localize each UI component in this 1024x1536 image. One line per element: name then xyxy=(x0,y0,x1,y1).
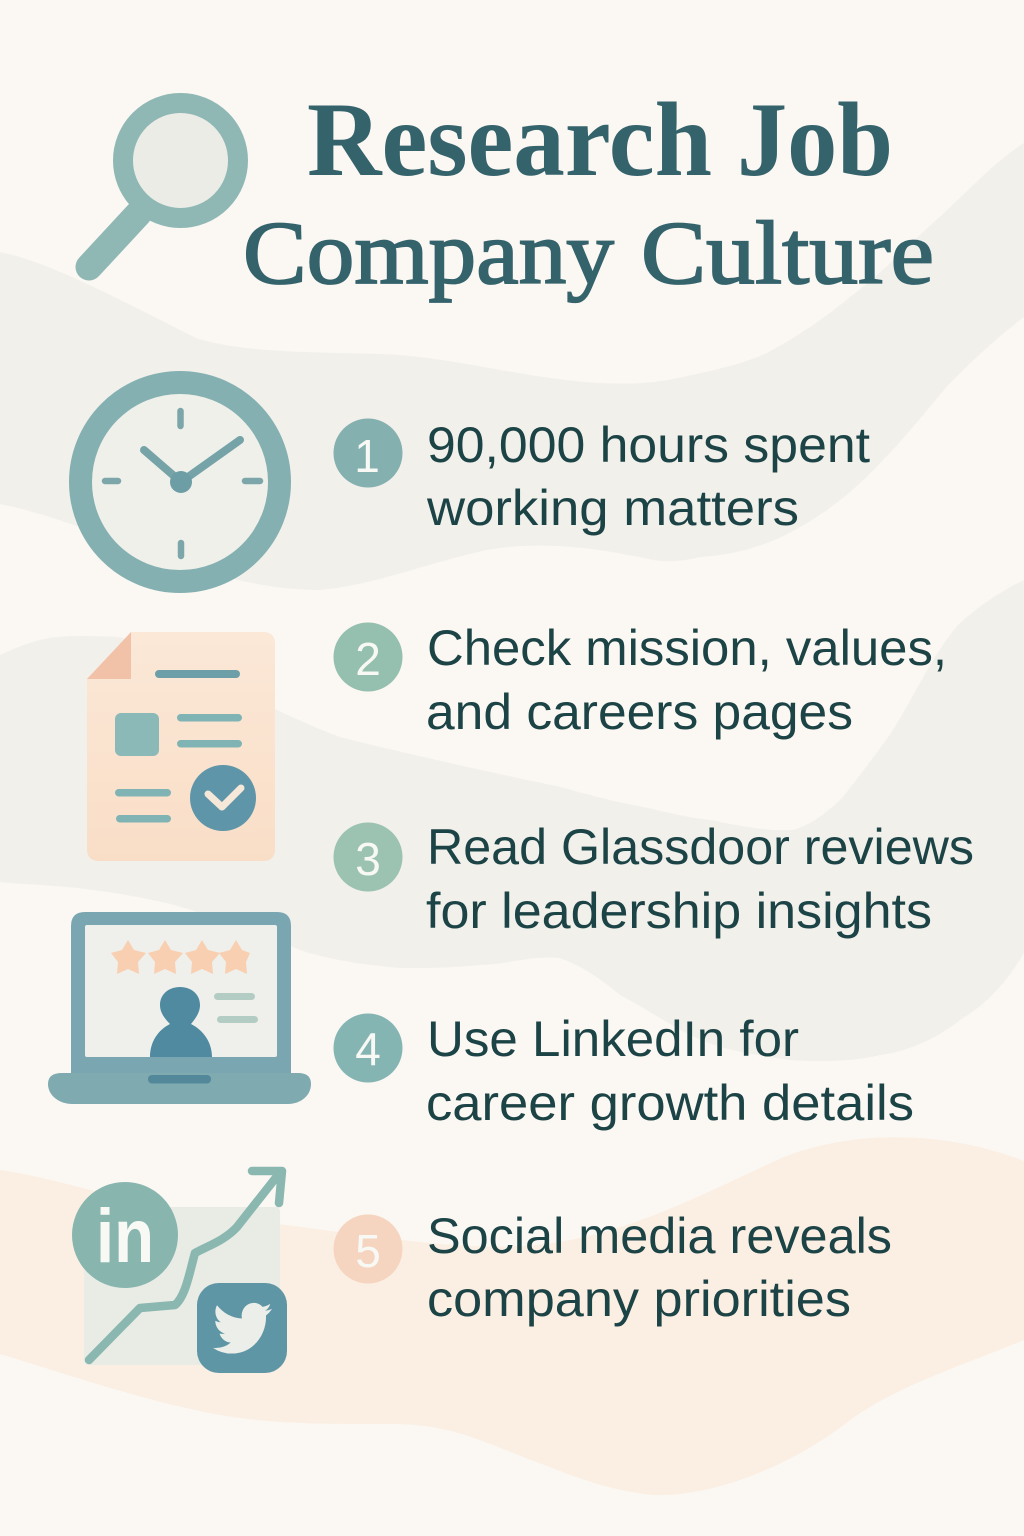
icon: social media growth xyxy=(72,1171,287,1373)
item 4: LinkedIn xyxy=(334,1011,914,1131)
title: Research xyxy=(307,81,712,198)
item 4: LinkedIn: 4 xyxy=(355,1023,381,1075)
item 1: 90,000 hours: 90,000 hours spent xyxy=(427,417,870,473)
item 5: social media xyxy=(334,1208,892,1327)
item 3: Glassdoor reviews: Read Glassdoor reviews xyxy=(427,819,974,875)
item 5: social media: 5 xyxy=(355,1225,381,1277)
title: Company xyxy=(243,204,614,303)
icon: clock xyxy=(80,382,280,582)
item 1: 90,000 hours xyxy=(334,417,870,536)
icon: laptop with reviews xyxy=(48,912,311,1104)
title xyxy=(243,81,934,303)
item 1: 90,000 hours: working matters xyxy=(426,480,799,536)
item 2: mission and values xyxy=(334,620,947,740)
item 2: mission and values: Check mission, values, xyxy=(427,620,947,676)
icon: social media growth: in xyxy=(96,1194,154,1279)
item 1: 90,000 hours: 1 xyxy=(354,430,380,482)
item 4: LinkedIn: career growth details xyxy=(426,1075,914,1131)
item 2: mission and values: 2 xyxy=(355,633,381,685)
title: Job xyxy=(737,81,893,198)
icon: magnifying glass xyxy=(89,103,238,267)
item 5: social media: company priorities xyxy=(427,1271,851,1327)
item 3: Glassdoor reviews xyxy=(334,819,974,939)
item 3: Glassdoor reviews: for leadership insights xyxy=(426,883,932,939)
item 3: Glassdoor reviews: 3 xyxy=(355,833,381,885)
title: Culture xyxy=(641,204,934,303)
icon: document checklist xyxy=(87,632,275,861)
item 5: social media: Social media reveals xyxy=(427,1208,892,1264)
item 2: mission and values: and careers pages xyxy=(426,684,853,740)
item 4: LinkedIn: Use LinkedIn for xyxy=(427,1011,799,1067)
